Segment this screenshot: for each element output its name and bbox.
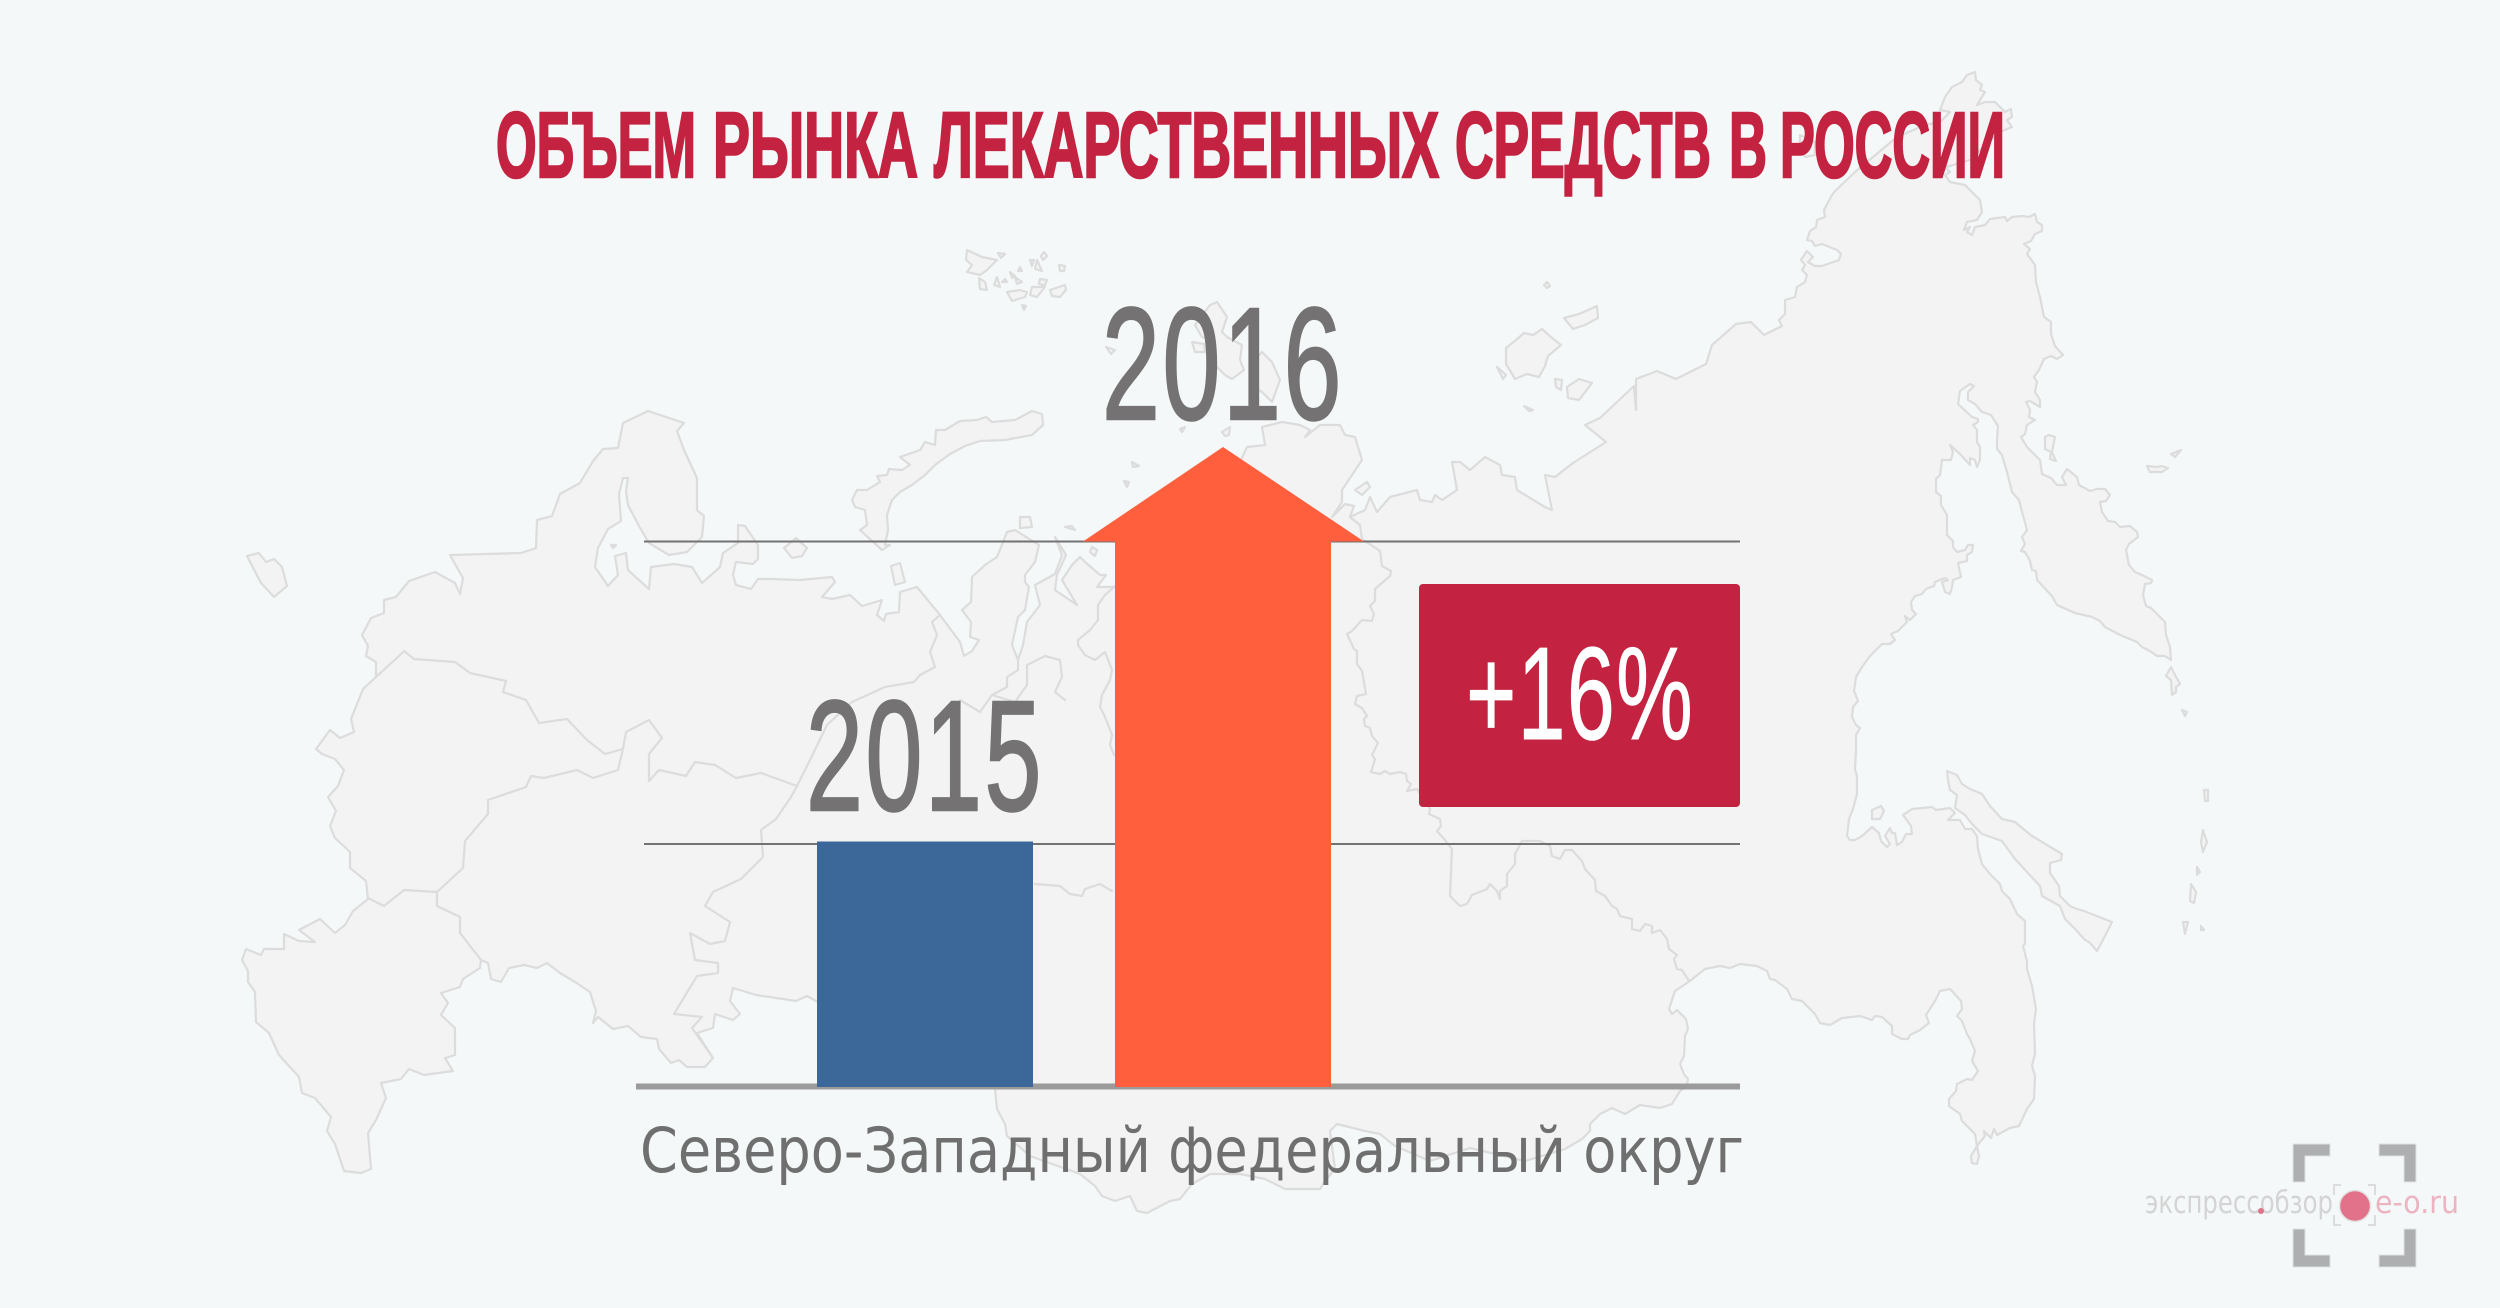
logo text right: e-o.ru bbox=[2375, 1185, 2459, 1221]
map: mainland outline bbox=[242, 72, 2171, 1213]
map: Novaya Zemlya bbox=[852, 411, 1043, 550]
map: Kaliningrad bbox=[247, 553, 287, 597]
title: ЛЕКАРСТВЕННЫХ bbox=[934, 93, 1439, 197]
logo outer frame corners bbox=[2293, 1144, 2416, 1267]
title: РЫНКА bbox=[713, 93, 918, 197]
title: ОБЪЕМ bbox=[496, 93, 696, 197]
logo inner frame corners bbox=[2334, 1185, 2375, 1225]
logo: экспресс-обзор watermark bbox=[2145, 1144, 2459, 1267]
map: Russia background silhouette bbox=[242, 72, 2208, 1213]
logo text left: экспрессобзор bbox=[2145, 1185, 2333, 1221]
callout value: +16% bbox=[1466, 620, 1694, 767]
title: РОССИИ bbox=[1780, 93, 2005, 197]
callout box bbox=[1419, 584, 1740, 807]
label 2016: 2016 bbox=[1102, 274, 1344, 453]
logo pink circle bbox=[2340, 1190, 2370, 1222]
arrow bar 2016 bbox=[1083, 447, 1364, 1087]
gridline lower bbox=[644, 843, 1740, 845]
logo pink dot bbox=[2258, 1208, 2264, 1214]
label 2015: 2015 bbox=[806, 669, 1044, 844]
map: Arctic and Pacific islands bbox=[611, 135, 2208, 934]
title: В bbox=[1729, 93, 1767, 197]
bar 2015 bbox=[817, 842, 1033, 1087]
caption: district name: Северо-Западный федеральный округ bbox=[640, 1114, 1744, 1187]
callout: growth +16% bbox=[1419, 584, 1740, 807]
map: internal federal district borders bbox=[368, 517, 1689, 1058]
map: Franz Josef Land bbox=[966, 250, 1066, 310]
chart: bar comparison bbox=[636, 274, 1740, 1090]
title bbox=[496, 93, 2005, 197]
map: Sakhalin bbox=[1947, 771, 2112, 951]
chart baseline bbox=[636, 1084, 1740, 1090]
title: СРЕДСТВ bbox=[1455, 93, 1711, 197]
gridline upper bbox=[644, 540, 1740, 542]
